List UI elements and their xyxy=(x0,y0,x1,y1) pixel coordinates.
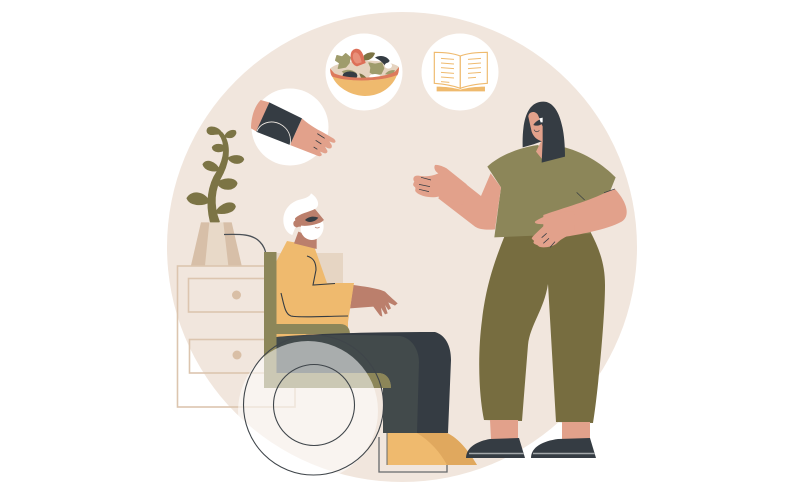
wheelchair seat xyxy=(264,373,391,388)
man's shoe xyxy=(387,433,477,465)
background circle xyxy=(167,12,637,482)
woman's shirt xyxy=(487,145,616,237)
woman's raised arm xyxy=(438,172,501,230)
wheelchair back cushion xyxy=(276,253,343,333)
man's face xyxy=(295,209,324,228)
man's legs xyxy=(276,332,451,433)
wheelchair frame xyxy=(264,252,391,388)
man's eye xyxy=(305,217,318,222)
woman's face xyxy=(528,112,543,142)
woman's upper body xyxy=(438,145,627,237)
woman's legs xyxy=(479,231,605,423)
vase xyxy=(191,222,242,266)
standing woman xyxy=(413,102,627,458)
woman's resting hand xyxy=(532,212,575,247)
plant stem and leaves xyxy=(187,127,243,222)
bubble: blood pressure cuff xyxy=(251,88,336,166)
woman's neck xyxy=(536,138,547,159)
woman's hair xyxy=(523,102,565,163)
woman's raised hand xyxy=(413,165,467,205)
shirt fold lines xyxy=(281,256,348,317)
woman's head xyxy=(523,102,565,163)
woman's resting arm xyxy=(543,189,627,237)
footrest xyxy=(379,437,447,472)
cuff cable xyxy=(224,234,266,254)
bubble: open book xyxy=(422,34,498,110)
man's forearm and hand xyxy=(350,285,398,317)
bubble: salad bowl xyxy=(326,34,402,110)
man's hair xyxy=(283,193,318,235)
dresser xyxy=(178,266,295,407)
man's beard xyxy=(301,222,324,240)
woman's ankles xyxy=(490,420,590,439)
man's neck xyxy=(294,232,317,249)
shoe stripes xyxy=(469,452,595,454)
man's head xyxy=(283,193,324,249)
man's shirt xyxy=(276,241,354,338)
seated man xyxy=(276,193,398,338)
woman's right shoe xyxy=(531,438,596,458)
plant in vase xyxy=(187,127,243,266)
woman's left shoe xyxy=(466,438,525,458)
woman's eye xyxy=(533,119,543,126)
wheel translucent disc xyxy=(238,341,378,481)
wheelchair wheel xyxy=(244,335,384,475)
